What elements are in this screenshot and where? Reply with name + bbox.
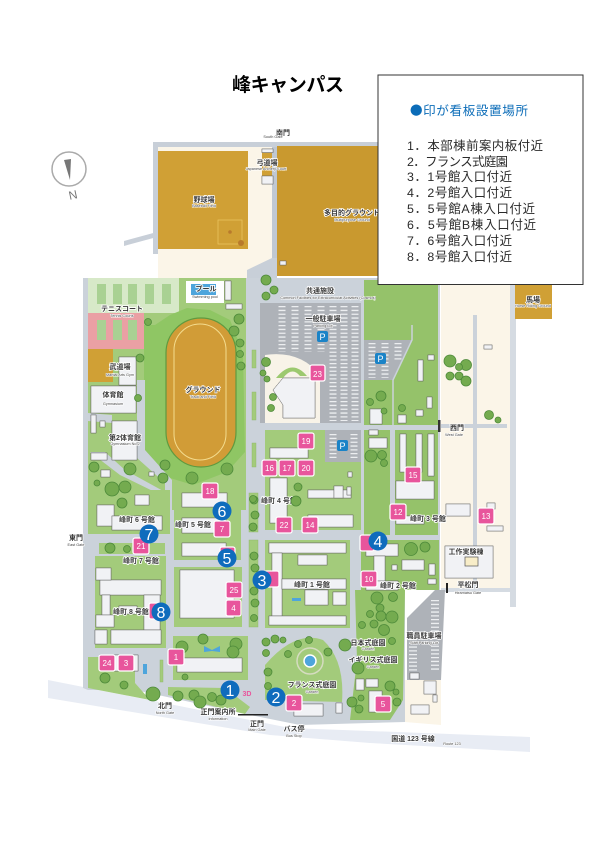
pink building number tags: 21 <box>137 542 146 551</box>
parking and middle area <box>249 280 552 672</box>
south center: 峰町 1 号館 <box>294 580 330 589</box>
parking and middle area: 峰町 4 号館 <box>261 496 297 505</box>
legend list: 3．1号館入口付近 <box>407 170 512 184</box>
parking and middle area: 馬場 <box>526 295 540 304</box>
sports area: Gymnasium <box>103 402 123 406</box>
legend list <box>407 138 543 264</box>
pink building number tags: 18 <box>206 487 215 496</box>
west lower blocks: North Gate <box>156 711 174 715</box>
pink building number tags: 3 <box>124 659 129 668</box>
road: national route 123 <box>48 680 530 752</box>
pink building number tags: 5 <box>381 700 386 709</box>
building 23 <box>273 378 315 418</box>
sports area: 第2体育館 <box>109 433 141 442</box>
pink building number tags: 10 <box>365 575 374 584</box>
gymnasium buildings <box>137 380 172 510</box>
sports area: Swimming pool <box>192 295 218 299</box>
south center: Garden <box>306 690 318 694</box>
pink building number tags: 15 <box>409 471 418 480</box>
west lower blocks: 正門案内所 <box>200 707 236 716</box>
parking and middle area: P <box>339 441 346 451</box>
sports area: テニスコート <box>101 305 143 313</box>
south center: Garden <box>362 647 374 651</box>
west lower blocks: 峰町 7 号館 <box>123 556 159 565</box>
pink building number tags: 12 <box>394 508 403 517</box>
south center: Bus Stop <box>286 734 302 738</box>
blue sign location markers: 6 <box>218 504 227 521</box>
parking and middle area: West Gate <box>445 433 463 437</box>
pool <box>186 281 224 303</box>
west lower blocks: 峰町 5 号館 <box>175 520 211 529</box>
P icons <box>317 331 328 342</box>
blue sign location markers: 1 <box>226 683 235 700</box>
south center: 日本式庭園 <box>350 638 386 647</box>
blue sign location markers: 7 <box>145 527 154 544</box>
pink building number tags: 4 <box>231 604 236 613</box>
north grounds <box>124 128 380 278</box>
legend list: 1．本部棟前案内板付近 <box>407 138 543 153</box>
pink building number tags: 1 <box>174 653 179 662</box>
parking and middle area: P <box>377 354 384 364</box>
blue sign location markers <box>140 502 388 707</box>
north grounds: 多目的グラウンド <box>324 208 380 217</box>
parking and middle area: Parking Lot <box>313 324 334 328</box>
south center: 職員駐車場 <box>406 631 442 640</box>
cream east area <box>441 278 511 588</box>
parking and middle area: 共通施設 <box>306 286 334 295</box>
south center: Route 123 <box>443 742 461 746</box>
south center: 平松門 <box>458 580 478 589</box>
north grounds: South Gate <box>263 135 283 139</box>
pink building number tags: 2 <box>292 699 297 708</box>
pink building number tags: 23 <box>313 370 322 379</box>
parking and middle area: P <box>319 332 326 342</box>
south center: Staff Parking Lot <box>410 641 439 645</box>
blue sign location markers: 4 <box>374 534 383 551</box>
west lower blocks: 東門 <box>69 533 83 542</box>
sports area <box>88 278 246 510</box>
sports area: Tennis Courts <box>110 314 134 318</box>
north grounds: 南門 <box>276 128 290 137</box>
campus map <box>48 128 552 752</box>
pink building number tags: 3D <box>243 691 251 698</box>
west lower blocks: 峰町 6 号館 <box>119 515 155 524</box>
sports area: 武道場 <box>110 362 130 371</box>
west lower blocks: 正門 <box>250 720 264 728</box>
parking and middle area: Common Facilities for Extracurricular Activities (Cosmos) <box>280 296 377 300</box>
parking and middle area: 西門 <box>450 424 464 432</box>
pink building number tags: 17 <box>283 464 292 473</box>
legend list: 2．フランス式庭園 <box>407 155 508 169</box>
blue sign location markers: 5 <box>223 551 232 568</box>
multipurpose ground <box>277 146 378 276</box>
legend list: 6．5号館B棟入口付近 <box>407 217 536 232</box>
icon: compass: N <box>67 187 79 203</box>
south center: 工作実験棟 <box>448 547 484 556</box>
legend list: 5．5号館A棟入口付近 <box>407 201 535 216</box>
west lower blocks: 北門 <box>158 701 172 710</box>
legend list: 7．6号館入口付近 <box>407 234 512 248</box>
sports area: プール <box>196 285 216 293</box>
title: 峰キャンパス <box>232 74 344 96</box>
baseball field <box>158 151 248 249</box>
north grounds: Multipurpose Ground <box>334 218 370 222</box>
north grounds: 野球場 <box>194 195 214 204</box>
blue sign location markers: 2 <box>272 690 281 707</box>
pink building number tags: 16 <box>265 464 274 473</box>
legend box <box>378 75 583 284</box>
south center: Hiramatsu Gate <box>455 591 481 595</box>
icon: compass <box>52 152 86 203</box>
south center: フランス式庭園 <box>288 680 336 689</box>
parking and middle area: 峰町 3 号館 <box>410 514 446 523</box>
blue sign location markers: 8 <box>157 605 166 622</box>
legend list: 8．8号館入口付近 <box>407 250 512 264</box>
pink building number tags: 24 <box>103 659 112 668</box>
sports area: 体育館 <box>102 390 124 399</box>
pink building number tags: 20 <box>302 464 311 473</box>
pink building number tags <box>99 365 494 712</box>
south center <box>238 540 493 746</box>
north grounds: Japanese Archery Court <box>246 167 287 171</box>
legend list: 4．2号館入口付近 <box>407 186 512 200</box>
pink building number tags: 13 <box>482 512 491 521</box>
pink building number tags: 14 <box>306 521 315 530</box>
tennis courts <box>88 278 179 313</box>
pink building number tags: 7 <box>220 525 225 534</box>
parking and middle area: Horse Riding Ground <box>515 304 551 308</box>
north grounds: Baseball Field <box>192 204 216 208</box>
pink building number tags: 25 <box>230 586 239 595</box>
south center: Garden <box>367 665 379 669</box>
trees <box>89 275 501 713</box>
west lower blocks: Information <box>208 717 228 721</box>
sports area: グラウンド <box>186 385 220 394</box>
south center: 国道 123 号線 <box>391 734 435 743</box>
legend heading: ●印が看板設置場所 <box>410 100 528 119</box>
west lower blocks: 峰町 8 号館 <box>113 607 149 616</box>
south center: バス停 <box>284 724 304 733</box>
west lower blocks: Main Gate <box>248 728 266 732</box>
stadium <box>144 308 245 485</box>
pink building number tags: 19 <box>302 437 311 446</box>
north grounds: 弓道場 <box>256 158 278 167</box>
pink building number tags: 22 <box>280 521 289 530</box>
road network base <box>83 278 440 725</box>
west lower blocks <box>68 490 266 732</box>
archery court <box>262 150 272 184</box>
south center: 峰町 2 号館 <box>380 581 416 590</box>
sports area: Track and Field <box>190 395 216 399</box>
blue sign location markers: 3 <box>258 573 267 590</box>
sports area: Gymnasium No.2 <box>110 442 140 446</box>
south center: イギリス式庭園 <box>348 655 398 664</box>
sports area: Martial Arts Gym <box>106 373 134 377</box>
west lower blocks: East Gate <box>68 543 84 547</box>
parking and middle area: 一般駐車場 <box>306 314 340 323</box>
